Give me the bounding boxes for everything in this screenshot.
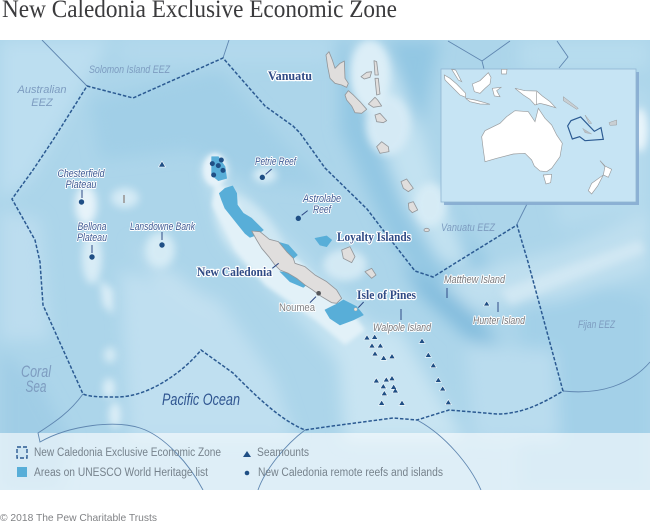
place labels: Plateau	[77, 232, 107, 244]
place labels: Plateau	[66, 179, 96, 191]
place labels: Noumea	[279, 302, 316, 314]
place labels: Chesterfield	[58, 168, 105, 180]
New Caledonia EEZ boundary	[12, 58, 563, 430]
legend: New Caledonia Exclusive Economic Zone	[34, 447, 221, 459]
EEZ labels: Solomon Island EEZ	[89, 64, 171, 76]
small reef	[123, 195, 125, 203]
legend: New Caledonia remote reefs and islands	[258, 467, 443, 479]
remote reef markers	[79, 190, 498, 320]
EEZ labels: Coral	[21, 362, 52, 381]
legend: UNESCO swatch	[17, 467, 27, 477]
place labels: Vanuatu	[268, 69, 312, 83]
place labels: Matthew Island	[444, 274, 506, 286]
place labels: Reef	[313, 204, 332, 216]
seamount near Chesterfield	[158, 161, 166, 167]
place labels: Astrolabe	[302, 193, 341, 205]
place labels: Lansdowne Bank	[130, 221, 195, 233]
inset: Australia	[482, 108, 562, 172]
legend	[17, 447, 443, 479]
EEZ labels: Fijan EEZ	[578, 319, 616, 331]
place labels: Bellona	[78, 221, 106, 233]
place labels: Isle of Pines	[357, 288, 416, 302]
inset: New Caledonia EEZ outline	[568, 117, 603, 141]
EEZ labels	[17, 64, 616, 396]
legend: EEZ swatch	[17, 447, 27, 458]
legend panel	[0, 433, 650, 490]
seamounts	[364, 301, 489, 405]
place labels	[58, 69, 526, 409]
legend: seamount symbol	[243, 451, 251, 457]
place labels: Hunter Island	[473, 315, 526, 327]
copyright: © 2018 The Pew Charitable Trusts	[0, 512, 157, 524]
place labels: Petrie Reef	[255, 156, 297, 168]
Vanuatu islands	[326, 52, 429, 232]
legend: reef symbol	[245, 471, 249, 475]
EEZ labels: Vanuatu EEZ	[441, 222, 496, 234]
EEZ labels: EEZ	[31, 97, 54, 109]
legend: Areas on UNESCO World Heritage list	[34, 467, 209, 479]
EEZ labels: Sea	[26, 377, 46, 396]
New Caledonia islands and World Heritage areas	[210, 157, 376, 325]
place labels: Walpole Island	[373, 322, 432, 334]
place labels: New Caledonia	[197, 265, 273, 279]
inset map	[441, 69, 639, 205]
place labels: Pacific Ocean	[162, 390, 240, 409]
EEZ labels: Australian	[17, 84, 66, 96]
place labels: Loyalty Islands	[337, 230, 411, 244]
legend: Seamounts	[257, 447, 309, 459]
